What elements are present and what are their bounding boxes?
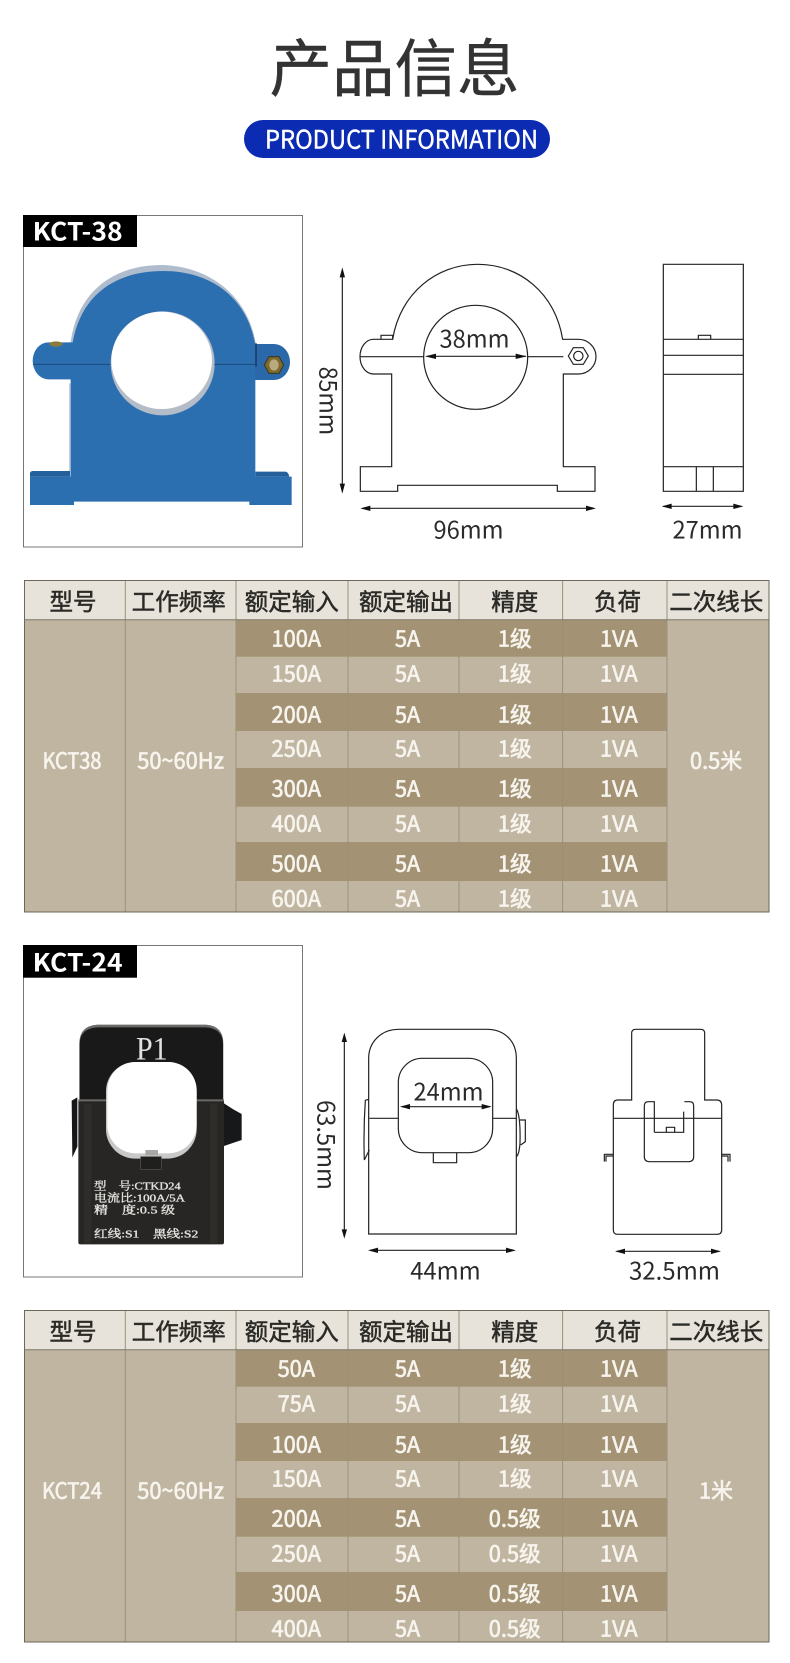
arrow: 32.5mm bbox=[615, 1249, 721, 1254]
row 500A: 5A bbox=[395, 848, 421, 879]
row 50A: 50A bbox=[278, 1353, 316, 1384]
row 150A: 1VA bbox=[600, 1463, 638, 1494]
arrow: 85mm bbox=[340, 267, 345, 494]
printed label: 红线:S1 黑线:S2 bbox=[94, 1227, 198, 1240]
row 100A: 1VA bbox=[600, 623, 638, 654]
row 75A: 1级 bbox=[498, 1388, 532, 1419]
row 250A: 1VA bbox=[600, 1538, 638, 1569]
row 100A: 100A bbox=[272, 623, 322, 654]
table: KCT38 specs bbox=[24, 580, 769, 914]
row 150A bbox=[272, 1463, 638, 1494]
row 300A bbox=[272, 1578, 638, 1609]
text: 32.5mm: 32.5mm bbox=[629, 1251, 720, 1286]
side clips bbox=[364, 1099, 525, 1160]
row 50A: 5A bbox=[395, 1353, 421, 1384]
merged cells: 1米 bbox=[699, 1474, 733, 1505]
arrow: 38mm bbox=[425, 354, 527, 359]
row 150A: 5A bbox=[395, 658, 421, 689]
row 100A: 1级 bbox=[498, 623, 532, 654]
table header: 额定输入 bbox=[245, 1313, 339, 1347]
row 250A bbox=[272, 1538, 638, 1569]
row 100A: 5A bbox=[395, 623, 421, 654]
row 250A: 0.5级 bbox=[489, 1538, 541, 1569]
row 600A: 5A bbox=[395, 883, 421, 914]
table: KCT24 specs bbox=[24, 1310, 769, 1644]
row 200A: 200A bbox=[272, 1503, 322, 1534]
row 300A bbox=[272, 773, 638, 804]
row 250A bbox=[272, 733, 638, 764]
centre hole bbox=[424, 305, 528, 409]
row 250A: 5A bbox=[395, 1538, 421, 1569]
text: 63.5mm: 63.5mm bbox=[310, 1100, 346, 1190]
row 600A: 600A bbox=[272, 883, 322, 914]
printed label: 精 度:0.5 级 bbox=[94, 1203, 175, 1216]
row 300A: 1级 bbox=[498, 773, 532, 804]
row 50A: 1级 bbox=[498, 1353, 532, 1384]
table header: 额定输入 bbox=[245, 583, 339, 617]
merged cells bbox=[42, 1474, 733, 1505]
row 200A: 1级 bbox=[498, 698, 532, 729]
merged cells: 50~60Hz bbox=[137, 1474, 224, 1505]
arrow: 96mm bbox=[360, 506, 596, 511]
row 400A: 5A bbox=[395, 1613, 421, 1644]
row 500A bbox=[272, 848, 638, 879]
outline bbox=[369, 1029, 516, 1234]
arrow: 44mm bbox=[368, 1248, 516, 1253]
table header: 负荷 bbox=[594, 1313, 641, 1347]
arrow: 24mm bbox=[400, 1104, 492, 1109]
merged cells: 50~60Hz bbox=[137, 744, 224, 775]
window bbox=[398, 1058, 493, 1153]
row 400A: 0.5级 bbox=[489, 1613, 541, 1644]
table header: 工作频率 bbox=[132, 583, 226, 617]
row 75A: 75A bbox=[278, 1388, 316, 1419]
row 100A: 5A bbox=[395, 1428, 421, 1459]
printed label: 电流比:100A/5A bbox=[94, 1191, 185, 1204]
row 250A: 250A bbox=[272, 733, 322, 764]
row 300A: 0.5级 bbox=[489, 1578, 541, 1609]
merged cells bbox=[42, 744, 742, 775]
diagram: KCT-24 side view bbox=[604, 1029, 730, 1254]
text: 38mm: 38mm bbox=[440, 319, 510, 354]
row 250A: 5A bbox=[395, 733, 421, 764]
row 150A: 1VA bbox=[600, 658, 638, 689]
table header: 二次线长 bbox=[669, 583, 763, 617]
row 150A bbox=[272, 658, 638, 689]
hex nut bbox=[568, 348, 588, 364]
subtitle pill: PRODUCT INFORMATION bbox=[265, 120, 538, 157]
row 400A: 400A bbox=[272, 1613, 322, 1644]
text: 96mm: 96mm bbox=[434, 510, 504, 545]
row 400A: 1VA bbox=[600, 808, 638, 839]
row 500A: 1级 bbox=[498, 848, 532, 879]
row 300A: 1VA bbox=[600, 1578, 638, 1609]
row 150A: 5A bbox=[395, 1463, 421, 1494]
row 400A: 1VA bbox=[600, 1613, 638, 1644]
row 50A: 1VA bbox=[600, 1353, 638, 1384]
table header: 型号 bbox=[50, 583, 96, 617]
text: 85mm: 85mm bbox=[312, 367, 347, 435]
row 200A: 1VA bbox=[600, 698, 638, 729]
diagram: KCT-24 front view with dimensions bbox=[342, 1029, 525, 1253]
row 100A: 100A bbox=[272, 1428, 322, 1459]
row 150A: 1级 bbox=[498, 1463, 532, 1494]
row 200A: 0.5级 bbox=[489, 1503, 541, 1534]
row 100A: 1级 bbox=[498, 1428, 532, 1459]
row 200A: 5A bbox=[395, 1503, 421, 1534]
row 500A: 1VA bbox=[600, 848, 638, 879]
row 250A: 1VA bbox=[600, 733, 638, 764]
photo: black KCT-24 transformer bbox=[72, 1025, 242, 1244]
table header: 二次线长 bbox=[669, 1313, 763, 1347]
table header: 工作频率 bbox=[132, 1313, 226, 1347]
text: 44mm: 44mm bbox=[410, 1251, 481, 1286]
merged cells: 0.5米 bbox=[690, 744, 742, 775]
table header bbox=[24, 580, 769, 620]
row 250A: 250A bbox=[272, 1538, 322, 1569]
row 200A bbox=[272, 698, 638, 729]
row 200A: 5A bbox=[395, 698, 421, 729]
row 200A: 200A bbox=[272, 698, 322, 729]
title: 产品信息 bbox=[270, 18, 520, 109]
text: 27mm: 27mm bbox=[672, 510, 742, 545]
arrow: 27mm bbox=[662, 504, 743, 509]
row 150A: 150A bbox=[272, 658, 322, 689]
label: KCT-38: KCT-38 bbox=[33, 213, 123, 249]
row 150A: 1级 bbox=[498, 658, 532, 689]
row 75A: 5A bbox=[395, 1388, 421, 1419]
row 100A bbox=[272, 1428, 638, 1459]
row 400A: 5A bbox=[395, 808, 421, 839]
row 50A bbox=[278, 1353, 638, 1384]
row 400A bbox=[272, 808, 638, 839]
row 75A: 1VA bbox=[600, 1388, 638, 1419]
row 100A: 1VA bbox=[600, 1428, 638, 1459]
row 300A: 5A bbox=[395, 773, 421, 804]
panel: KCT-38 product photo bbox=[23, 213, 302, 547]
arrow: 63.5mm bbox=[342, 1033, 347, 1239]
row 300A: 1VA bbox=[600, 773, 638, 804]
row 400A: 400A bbox=[272, 808, 322, 839]
row 75A bbox=[278, 1388, 638, 1419]
row 400A: 1级 bbox=[498, 808, 532, 839]
photo: blue KCT-38 transformer bbox=[30, 265, 292, 505]
printed label: 型 号:CTKD24 bbox=[94, 1179, 181, 1192]
row 100A bbox=[272, 623, 638, 654]
table header bbox=[24, 1310, 769, 1350]
merged cells: KCT38 bbox=[42, 744, 102, 775]
diagram: KCT-38 side view bbox=[662, 264, 743, 509]
row 300A: 300A bbox=[272, 773, 322, 804]
photo: black KCT-24 transformer: P1 bbox=[136, 1031, 168, 1067]
text: 24mm: 24mm bbox=[414, 1073, 484, 1108]
row 250A: 1级 bbox=[498, 733, 532, 764]
table header: 负荷 bbox=[594, 583, 641, 617]
table header: 额定输出 bbox=[359, 1313, 453, 1347]
table header: 精度 bbox=[491, 583, 538, 617]
printed label bbox=[94, 1179, 198, 1240]
row 200A: 1VA bbox=[600, 1503, 638, 1534]
label: KCT-24: KCT-24 bbox=[33, 944, 123, 980]
merged cells: KCT24 bbox=[42, 1474, 102, 1505]
row 150A: 150A bbox=[272, 1463, 322, 1494]
diagram: KCT-38 front view with dimensions bbox=[340, 264, 596, 511]
row 600A: 1VA bbox=[600, 883, 638, 914]
row 300A: 300A bbox=[272, 1578, 322, 1609]
table header: 额定输出 bbox=[359, 583, 453, 617]
row 300A: 5A bbox=[395, 1578, 421, 1609]
row 400A bbox=[272, 1613, 638, 1644]
outline bbox=[360, 264, 596, 491]
row 200A bbox=[272, 1503, 638, 1534]
panel: KCT-24 product photo bbox=[23, 944, 302, 1277]
row 500A: 500A bbox=[272, 848, 322, 879]
row 600A: 1级 bbox=[498, 883, 532, 914]
table header: 精度 bbox=[491, 1313, 538, 1347]
table header: 型号 bbox=[50, 1313, 96, 1347]
row 600A bbox=[272, 883, 638, 914]
